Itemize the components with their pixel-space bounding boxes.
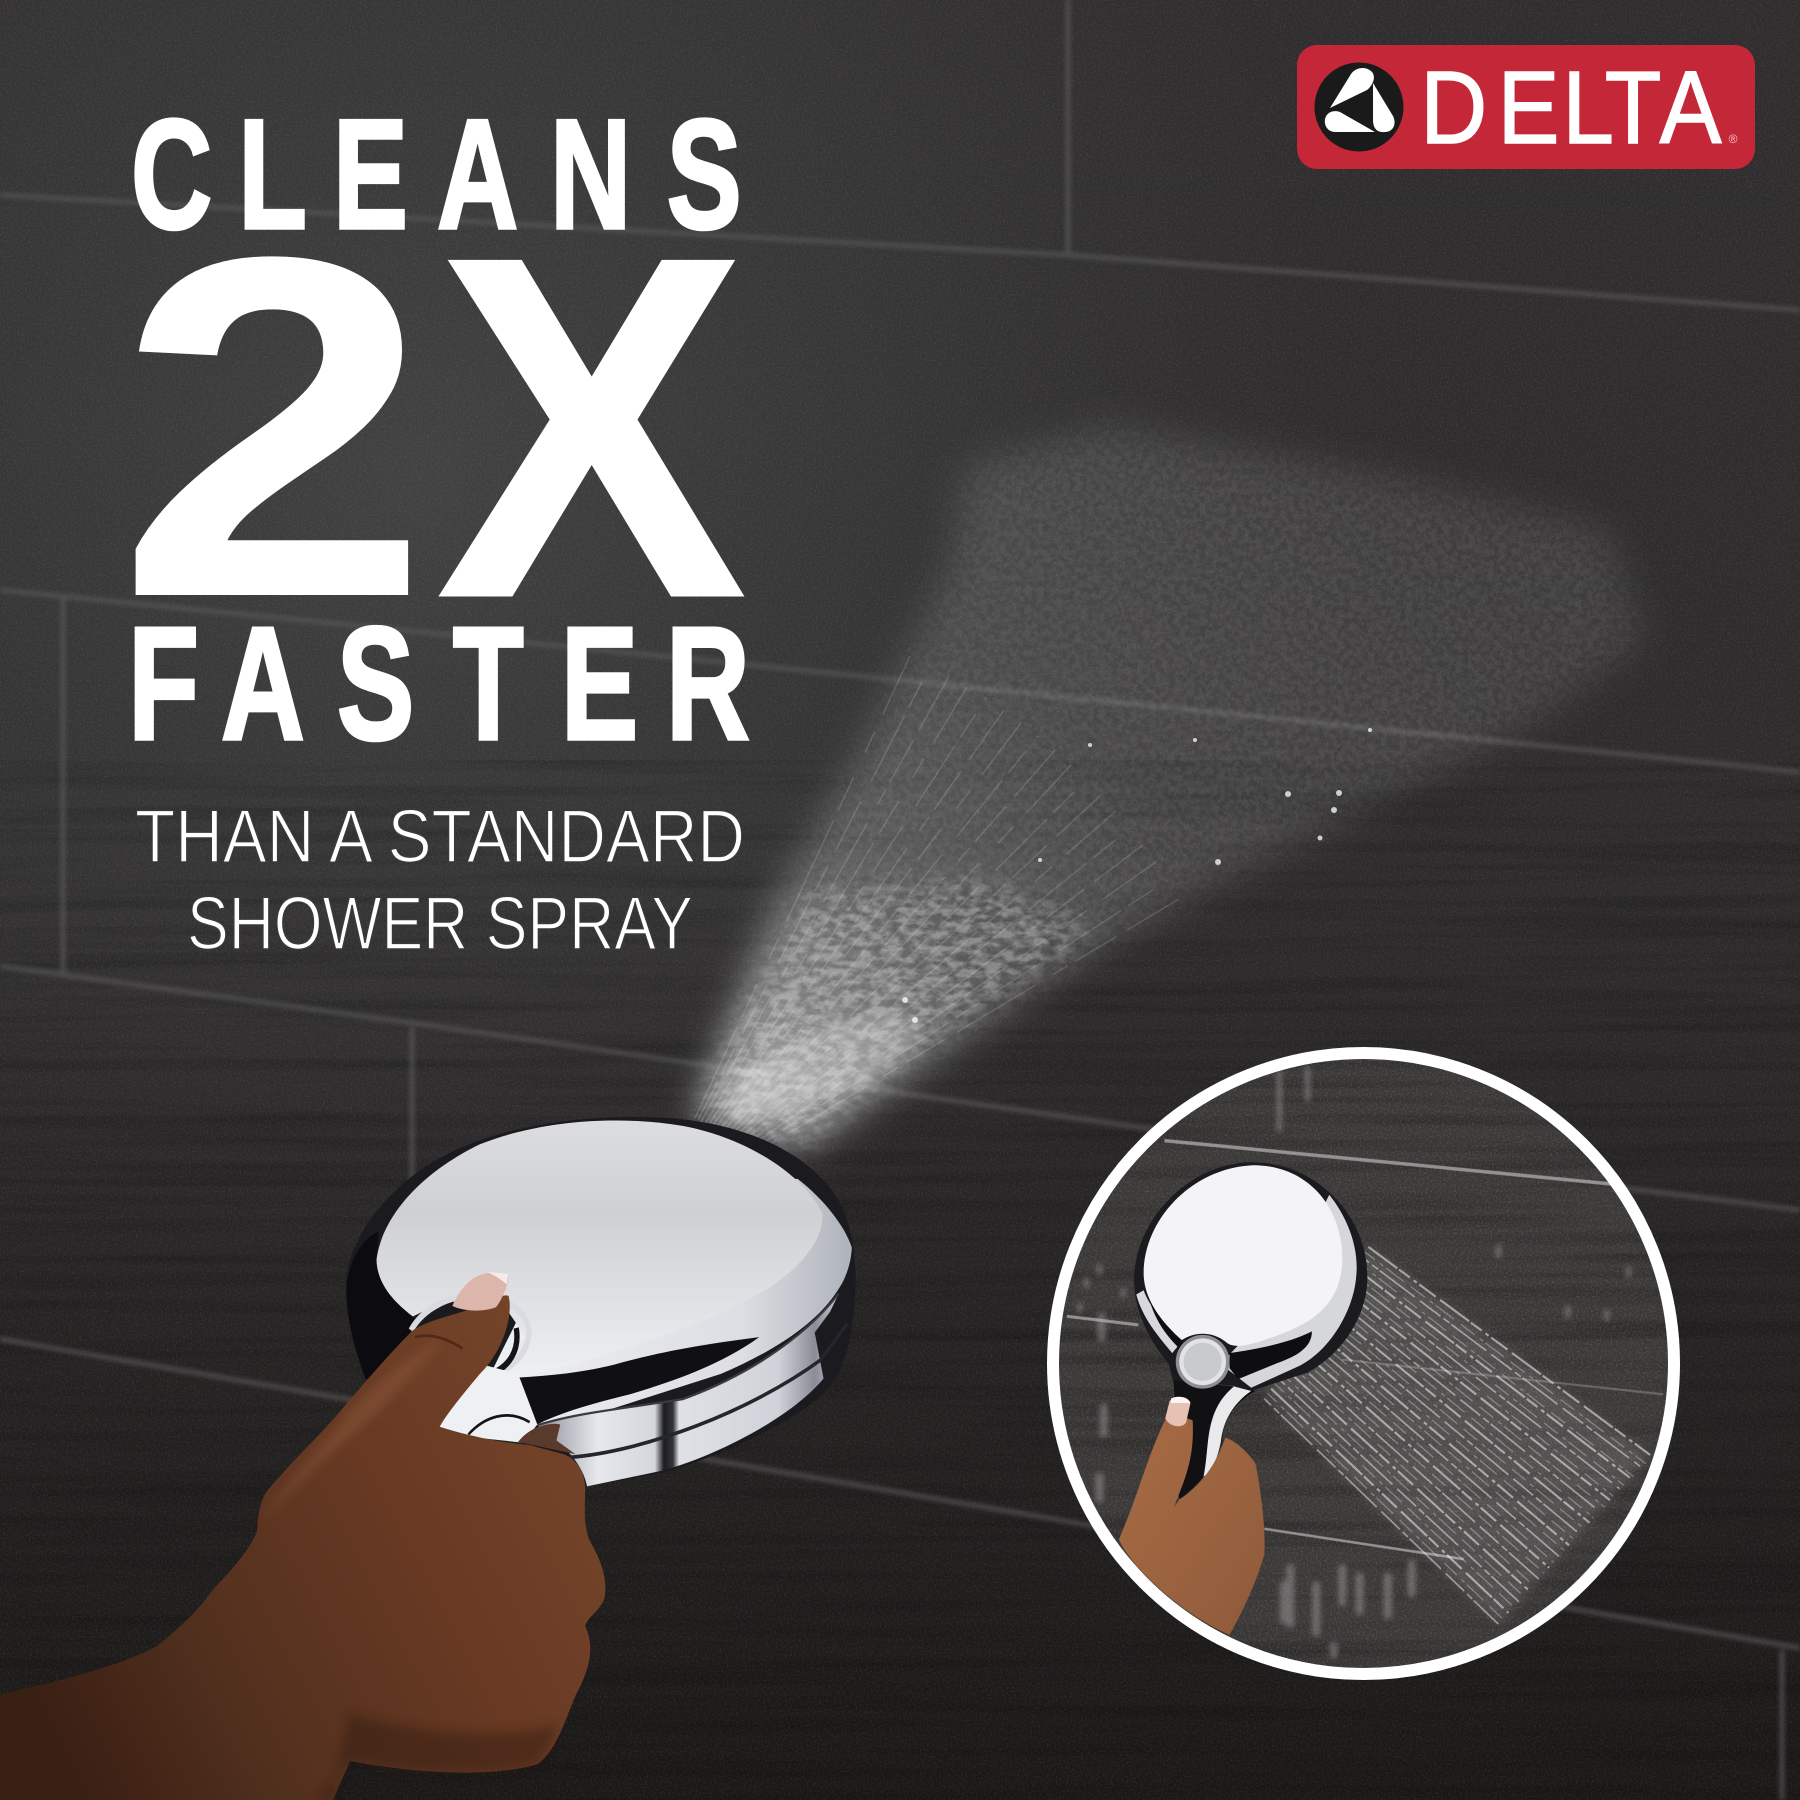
headline: cleans: CLEANS <box>131 87 742 261</box>
inset shower head <box>1134 1162 1367 1499</box>
chrome rim <box>484 1179 852 1425</box>
thumb crease <box>415 1336 463 1349</box>
dark reflection band <box>442 1337 759 1435</box>
finger reflection <box>518 1424 576 1454</box>
hand with shower head (main product) <box>0 1117 856 1800</box>
inset button <box>1176 1335 1230 1389</box>
subheading: than a standard: THAN A STANDARD <box>135 794 745 878</box>
rim edge highlight <box>537 1294 839 1425</box>
button ring <box>411 1296 529 1378</box>
hand highlight <box>262 1337 445 1521</box>
chrome lower band <box>537 1294 839 1486</box>
headline: 2X: X <box>437 157 748 698</box>
headline: 2X <box>116 156 748 698</box>
headline: faster: FASTER <box>128 593 750 773</box>
hand and forearm <box>0 1295 605 1800</box>
shower head top face <box>377 1120 823 1379</box>
registered mark: ® <box>1729 132 1738 146</box>
shower head dark back shell <box>346 1117 856 1486</box>
headline: 2X: 2 <box>116 156 431 698</box>
water jets <box>1264 1247 1650 1624</box>
wall lines and drips <box>1067 1069 1663 1655</box>
groove line <box>568 1323 847 1457</box>
inset wall <box>1050 1050 1680 1680</box>
inset hand <box>1119 1397 1265 1635</box>
inset handle <box>1173 1380 1256 1499</box>
inset white ring <box>1053 1053 1674 1674</box>
spray: fine mist and water cone <box>694 426 1644 1161</box>
thumb nail <box>452 1273 509 1311</box>
subheading: shower spray: SHOWER SPRAY <box>187 881 693 965</box>
logo mark: black circle with three white petals <box>1314 62 1404 152</box>
lower hand shadow <box>315 1714 558 1800</box>
left dark crescent <box>346 1232 415 1381</box>
logo: Delta red badge <box>1297 45 1755 169</box>
handle reflection arc <box>468 1415 530 1435</box>
chrome handle <box>430 1362 537 1443</box>
inset circle: spray pattern detail <box>1050 1050 1680 1680</box>
logo wordmark: DELTA <box>1420 49 1722 165</box>
